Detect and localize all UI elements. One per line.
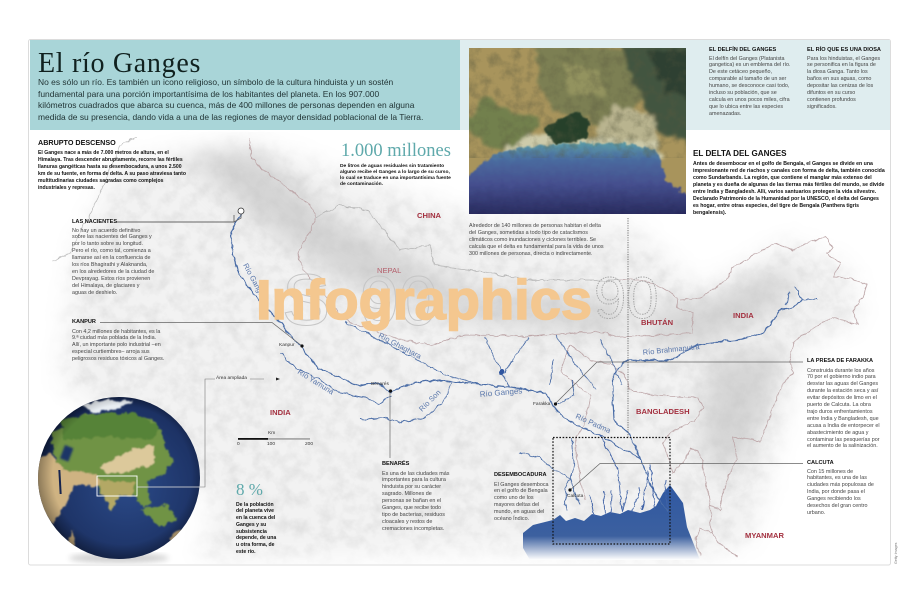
el delta del ganges: planeta y es dueña de algunas de las tierras más fértiles del mundo, se divide (693, 182, 884, 188)
stat: 1.000 millones: De litros de aguas residuales sin tratamiento (340, 164, 444, 168)
kanpur: especial curtiembres– arroja sus (72, 349, 150, 355)
el río que es una diosa: difuntos en su curso (807, 90, 855, 96)
delta zoom frame (553, 438, 670, 544)
credit: Getty Images (894, 542, 898, 564)
el río que es una diosa (807, 46, 881, 110)
photo caption: 300 millones de personas, directa o indirectamente. (469, 250, 592, 256)
el río que es una diosa: contienen profundos (807, 97, 856, 103)
el delfín del ganges: humano, se desconoce casi todo, (709, 83, 789, 89)
el delta del ganges (693, 149, 885, 216)
el delfín del ganges: gangetica) es un emblema del río. (709, 62, 791, 68)
stat: 8 %: depende, de una (236, 535, 276, 541)
la presa de farakka: abastecimiento de agua y (807, 430, 868, 436)
photo caption: climáticos como inundaciones y ciclones terribles. Se (469, 236, 596, 242)
las nacientes: en los alrededores de la ciudad de (72, 269, 154, 275)
las nacientes (72, 219, 154, 296)
abrupto descenso: multitudinarias ciudades sagradas como complejos (38, 178, 163, 184)
benarés: Ganges, que recibe todo (382, 505, 441, 511)
el delfín del ganges: comparable al tamaño de un ser (709, 76, 786, 82)
kanpur: KANPUR (72, 319, 96, 325)
calcuta: habitantes, es una de las (807, 475, 867, 481)
photo caption: del Ganges, sometidas a todo tipo de cataclismos (469, 230, 588, 236)
watermark (256, 261, 659, 341)
desembocadura: mayores deltas del (494, 502, 539, 508)
el río que es una diosa: EL RÍO QUE ES UNA DIOSA (807, 47, 881, 53)
las nacientes: Devprayag. Estos ríos provienen (72, 276, 150, 282)
la presa de farakka: evitar depósitos de limo en el (807, 395, 877, 401)
watermark: S (282, 261, 330, 341)
borders (52, 137, 867, 557)
intro text: No es sólo un río. Es también un icono religioso, un símbolo de la cultura hinduista y un sostén (38, 77, 393, 87)
watermark: 90 (360, 262, 438, 340)
country: china: CHINA (417, 211, 441, 220)
calcuta: India, por donde pasa el (807, 489, 865, 495)
abrupto descenso: industriales y represas. (38, 185, 95, 191)
el delta del ganges: Declarado Patrimonio de la Humanidad por la UNESCO, el delta del Ganges (693, 196, 879, 202)
el delfín del ganges: que lo ubica entre las especies (709, 104, 783, 110)
abrupto descenso: El Ganges nace a más de 7.000 metros de altura, en el (38, 150, 169, 156)
kanpur: Con 4,2 millones de habitantes, es la (72, 328, 160, 334)
city markers (300, 344, 572, 492)
calcuta: CALCUTA (807, 460, 834, 466)
city: benares: Benarés (371, 382, 389, 387)
side panel background (460, 40, 890, 130)
las nacientes: llamarse así en la confluencia de (72, 255, 151, 261)
el delfín del ganges: El delfín del Ganges (Platanista (709, 56, 785, 62)
stat: 1.000 millones: lo cual se traduce en una importantísima fuente (340, 176, 451, 181)
el delta del ganges: entre India y Bangladesh. Allí, varios santuarios protegen la vida silvestre. (693, 189, 876, 195)
las nacientes: los ríos Bhagirathi y Alaknanda, (72, 262, 148, 268)
country: india: INDIA (270, 408, 291, 416)
scale labels: Km (268, 431, 275, 436)
las nacientes: sobre las nacientes del Ganges y (72, 234, 152, 240)
desembocadura (494, 472, 549, 522)
el río que es una diosa: depositar las cenizas de los (807, 83, 873, 89)
intro text (38, 77, 423, 122)
stat: 8 %: del planeta vive (236, 508, 274, 514)
scale bar (238, 438, 310, 440)
la presa de farakka: durante la estación seca y así (807, 388, 878, 394)
las nacientes: Pero el río, como tal, comienza a (72, 248, 151, 254)
scale labels (237, 431, 313, 447)
calcuta: urbano. (807, 510, 825, 516)
el río que es una diosa: Para los hinduistas, el Ganges (807, 56, 880, 62)
abrupto descenso: ABRUPTO DESCENSO (38, 138, 116, 147)
kanpur (72, 319, 164, 362)
stat: 1.000 millones: alguno recibe el Ganges a lo largo de su curso, (340, 170, 450, 175)
river labels (241, 262, 701, 435)
desembocadura: El Ganges desemboca (494, 482, 549, 488)
stat: 8 %: De la población (236, 502, 274, 508)
desembocadura: como uno de los (494, 495, 534, 501)
kanpur: peligrosos residuos tóxicos al Ganges. (72, 356, 164, 362)
el río que es una diosa: baños en sus aguas, como (807, 76, 871, 82)
el delfín del ganges: calcula en unos pocos miles, cifra (709, 97, 790, 103)
la presa de farakka: el aumento de la salinización. (807, 443, 878, 449)
stat: 8 %: en la cuenca del (236, 515, 275, 521)
scale labels: 100 (267, 442, 275, 447)
kanpur: Allí, un importante polo industrial –en (72, 342, 161, 348)
intro text: fundamental para una porción importantísima de los habitantes del planeta. En los 907.000 (38, 88, 379, 98)
desembocadura: DESEMBOCADURA (494, 472, 547, 478)
calcuta: Con 15 millones de (807, 468, 853, 474)
la presa de farakka: contaminar las pesquerías por (807, 437, 880, 443)
abrupto descenso: km de su fuente, en forma de delta. A su paso atraviesa tanto (38, 171, 186, 177)
la presa de farakka: 70 por el gobierno indio para (807, 374, 876, 380)
las nacientes: por lo tanto sobre su longitud. (72, 241, 143, 247)
intro text: medida de su presencia, dando vida a una de las regiones de mayor densidad poblacional de la Tierra. (38, 112, 423, 122)
calcuta: ciudades más populosas de (807, 482, 874, 488)
satellite photo (463, 43, 693, 217)
el delta del ganges: bengalensis). (693, 210, 726, 216)
el delta del ganges: como Sundarbands. La región, que contiene el manglar más extenso del (693, 175, 872, 181)
calcuta: desechos del gran centro (807, 503, 868, 509)
city: calcuta: Calcuta (567, 494, 583, 499)
el delfín del ganges: amenazadas. (709, 111, 741, 117)
benarés: cloacales y restos de (382, 519, 432, 525)
photo caption (469, 222, 604, 256)
desembocadura: mundo, en aguas del (494, 509, 544, 515)
stat: 1.000 millones: 1.000 millones (341, 141, 451, 161)
stat: 8 %: 8 % (236, 480, 263, 499)
globe area rectangle (97, 476, 137, 496)
el río que es una diosa: se personifica en la figura de (807, 62, 876, 68)
el delta del ganges: impresionante red de riachos y canales con forma de delta, también conocida (693, 168, 885, 174)
benarés: cremaciones incompletas. (382, 526, 444, 532)
river labels: Río Son (417, 388, 443, 413)
globe shadow (69, 553, 169, 563)
country: myanmar: MYANMAR (745, 530, 784, 540)
abrupto descenso (38, 138, 186, 191)
abrupto descenso: llanuras gangéticas hasta su desembocadura, a unos 2.500 (38, 164, 182, 170)
la presa de farakka: desviar las aguas del Ganges (807, 381, 878, 387)
city: kanpur: Kanpur (279, 343, 294, 348)
benarés: tipo de bacterias, residuos (382, 512, 445, 518)
river labels: Río Padma (574, 412, 613, 435)
el delta del ganges: EL DELTA DEL GANGES (693, 149, 787, 158)
las nacientes: LAS NACIENTES (72, 219, 117, 225)
country: bhutan: BHUTÁN (641, 318, 673, 326)
globe (33, 379, 264, 563)
leader lines (100, 214, 803, 490)
benarés: hinduista por su carácter (382, 484, 441, 490)
stat: 1.000 millones: de contaminación. (340, 182, 383, 187)
la presa de farakka: trajo duros enfrentamientos (807, 409, 873, 415)
intro text: kilómetros cuadrados que abarca su cuenca, más de 400 millones de personas dependen en alguna (38, 100, 414, 110)
title: El río Ganges (38, 48, 201, 79)
stat: 8 % (236, 480, 276, 555)
area arrow (276, 378, 280, 380)
country: nepal: NEPAL (377, 266, 401, 274)
photo caption: calcula que el delta es fundamental para la vida de unos (469, 244, 604, 250)
country: bangladesh: BANGLADESH (636, 406, 690, 416)
las nacientes: aguas de deshielo. (72, 290, 117, 296)
stat: 1.000 millones (340, 141, 451, 187)
las nacientes: No hay un acuerdo definitivo (72, 228, 140, 234)
benarés: BENARÉS (382, 461, 409, 467)
area connector (137, 379, 264, 487)
el delta del ganges: Antes de desembocar en el golfo de Bengala, el Ganges se divide en una (693, 160, 873, 166)
photo caption: Alrededor de 140 millones de personas habitan el delta (469, 222, 601, 228)
desembocadura: océano Índico. (494, 516, 529, 522)
dotted connector to photo (627, 218, 629, 437)
benarés: Es una de las ciudades más (382, 470, 449, 476)
el delfín del ganges: incluso su población, que se (709, 90, 777, 96)
stat: 8 %: Ganges y su (236, 522, 266, 528)
las nacientes: del Himalaya, de glaciares y (72, 283, 139, 289)
la presa de farakka (807, 358, 880, 449)
header panel (30, 40, 460, 130)
el río que es una diosa: la diosa Ganga. Tanto los (807, 69, 868, 75)
river labels: Río Yamuna (296, 367, 336, 397)
desembocadura: en el golfo de Bengala (494, 488, 548, 494)
la presa de farakka: acusa a India de entorpecer el (807, 423, 880, 429)
el delta del ganges: es hogar, entre otras especies, del tigre de Bengala (Panthera tigris (693, 203, 859, 209)
scale labels: 0 (237, 442, 240, 447)
river labels: Río Ganges (479, 386, 523, 399)
sea: bay of Bengal (523, 485, 700, 560)
stat: 8 %: u otra forma, de (236, 542, 274, 548)
el río que es una diosa: significados. (807, 104, 837, 110)
scale labels: 200 (305, 442, 313, 447)
el delfín del ganges (709, 46, 791, 117)
watermark: 90 (594, 266, 659, 331)
source marker (238, 208, 244, 214)
river labels: Río Ghaghara (377, 331, 424, 361)
benarés: sagrado. Millones de (382, 491, 432, 497)
river labels: Río Ganges (241, 262, 268, 301)
la presa de farakka: LA PRESA DE FARAKKA (807, 358, 873, 364)
stat: 8 %: subsistencia (236, 529, 267, 535)
area label: Área ampliada (216, 376, 247, 381)
relief map (30, 132, 890, 564)
benarés: importantes para la cultura (382, 477, 446, 483)
kanpur: 9.ª ciudad más poblada de la India. (72, 335, 156, 341)
el delfín del ganges: De este cetáceo pequeño, (709, 69, 772, 75)
benarés: personas se bañan en el (382, 498, 441, 504)
calcuta (807, 460, 874, 516)
watermark: Infographics (256, 268, 592, 331)
la presa de farakka: Construida durante los años (807, 368, 874, 374)
city: farakka: Farakka (533, 402, 550, 407)
el delfín del ganges: EL DELFÍN DEL GANGES (709, 47, 776, 53)
la presa de farakka: entre India y Bangladesh, que (807, 416, 879, 422)
calcuta: Ganges recibiendo los (807, 496, 861, 502)
benarés (382, 460, 450, 532)
stat: 8 %: este río. (236, 549, 256, 555)
abrupto descenso: Himalaya. Tras descender abruptamente, recorre las fértiles (38, 157, 183, 163)
rivers (231, 214, 817, 516)
country: india north-east: INDIA (733, 310, 754, 320)
river labels: Río Brahmaputra (642, 342, 701, 357)
la presa de farakka: puerto de Calcuta. La obra (807, 402, 871, 408)
